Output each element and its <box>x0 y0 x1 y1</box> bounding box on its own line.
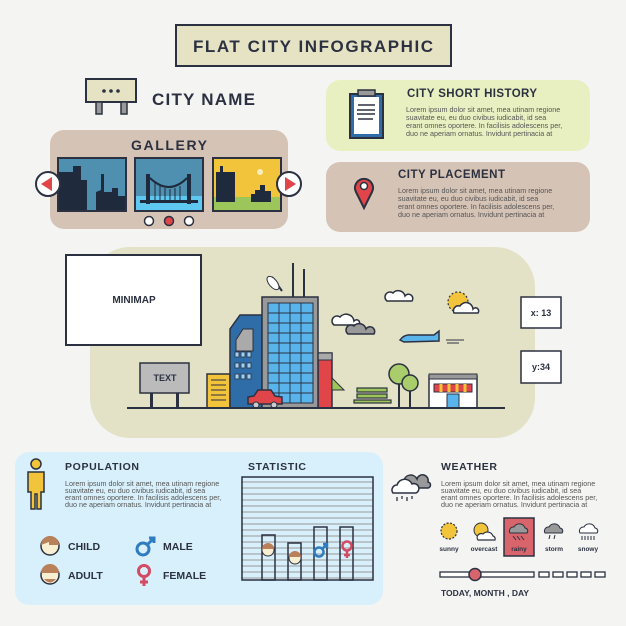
buildings <box>207 263 344 408</box>
weather: sunny <box>439 523 459 553</box>
panel: population: erant omnes oportere. In facilisis adolescens per, <box>65 493 221 502</box>
panel: city map <box>66 247 561 438</box>
icon: sun cloud <box>448 292 479 313</box>
ground line <box>127 407 505 409</box>
panel: population <box>15 452 383 605</box>
weather: snowy: snowy <box>578 546 598 553</box>
panel: weather: erant omnes oportere. In facilisis adolescens per, <box>441 493 597 502</box>
minimap: MINIMAP <box>112 295 156 306</box>
weather: storm <box>544 524 563 553</box>
icon: person <box>28 459 44 509</box>
panel: weather: duo ne aperiam ornatus. Invidunt pertinacia at <box>441 500 587 509</box>
bench <box>354 388 391 403</box>
panel: weather: WEATHER <box>441 461 497 473</box>
coordinate x <box>521 297 561 328</box>
minimap <box>66 255 201 345</box>
legend: female <box>138 566 206 586</box>
weather: rainy selected <box>504 518 534 556</box>
icon: clipboard <box>350 90 383 138</box>
panel: population: suavitate eu, eu duo civibus iudicabit, id sea <box>65 486 205 495</box>
billboard: TEXT <box>153 373 177 383</box>
billboard <box>140 363 189 408</box>
legend: child: CHILD <box>68 541 100 553</box>
legend: adult <box>41 564 103 584</box>
panel: gallery <box>36 130 301 229</box>
airplane <box>400 331 464 343</box>
title: FLAT CITY INFOGRAPHIC <box>193 37 433 56</box>
icon: map pin <box>355 179 373 208</box>
image 1 <box>58 158 126 211</box>
panel: city placement: suavitate eu, eu duo civibus iudicabit, id sea <box>398 194 538 203</box>
legend: adult: ADULT <box>68 570 103 582</box>
pager dots <box>144 216 194 226</box>
coordinate y <box>521 351 561 383</box>
panel: gallery: GALLERY <box>131 137 208 153</box>
panel: weather: suavitate eu, eu duo civibus iudicabit, id sea <box>441 486 581 495</box>
legend: male <box>137 538 193 555</box>
title <box>176 25 451 66</box>
weather: rainy selected: rainy <box>511 546 527 553</box>
weather: snowy <box>578 524 598 553</box>
panel: population: duo ne aperiam ornatus. Invidunt pertinacia at <box>65 500 211 509</box>
arrow right <box>277 172 301 196</box>
panel: city placement <box>326 162 590 232</box>
clouds <box>332 291 413 334</box>
car <box>248 390 282 408</box>
panel: city short history: CITY SHORT HISTORY <box>407 88 537 100</box>
weather: overcast: overcast <box>471 546 498 553</box>
panel: city short history: suavitate eu, eu duo civibus iudicabit, id sea <box>406 113 546 122</box>
weather: sunny: sunny <box>439 546 459 553</box>
panel: city short history: Lorem ipsum dolor sit amet, mea utinam regione <box>406 105 560 114</box>
arrow left <box>36 172 60 196</box>
panel: population: POPULATION <box>65 461 139 473</box>
legend: male: MALE <box>163 541 193 553</box>
icon: rain cloud <box>392 475 431 501</box>
panel: city placement: duo ne aperiam ornatus. Invidunt pertinacia at <box>398 210 544 219</box>
chart: statistic <box>241 477 373 580</box>
image 3 <box>213 158 281 211</box>
panel: population: STATISTIC <box>248 461 306 473</box>
heading: city name: CITY NAME <box>152 90 255 109</box>
weather: overcast <box>471 523 498 553</box>
shop <box>429 374 477 408</box>
panel: population: Lorem ipsum dolor sit amet, mea utinam regione <box>65 479 219 488</box>
panel: weather: Lorem ipsum dolor sit amet, mea utinam regione <box>441 479 595 488</box>
trees <box>389 364 418 408</box>
panel: weather: TODAY, MONTH , DAY <box>441 588 529 598</box>
panel: weather <box>392 461 605 598</box>
panel: city placement: erant omnes oportere. In facilisis adolescens per, <box>398 202 554 211</box>
panel: city short history: duo ne aperiam ornatus. Invidunt pertinacia at <box>406 129 552 138</box>
coordinate y: y:34 <box>532 362 550 372</box>
panel: city short history <box>326 80 590 151</box>
icon: city sign <box>86 79 136 114</box>
panel: city placement: CITY PLACEMENT <box>398 169 505 181</box>
panel: city short history: erant omnes oportere. In facilisis adolescens per, <box>406 121 562 130</box>
legend: female: FEMALE <box>163 570 206 582</box>
slider <box>440 568 605 580</box>
image 2 <box>135 158 203 211</box>
legend: child <box>41 536 100 555</box>
weather: storm: storm <box>545 546 563 553</box>
coordinate x: x: 13 <box>531 308 551 318</box>
panel: city placement: Lorem ipsum dolor sit amet, mea utinam regione <box>398 186 552 195</box>
